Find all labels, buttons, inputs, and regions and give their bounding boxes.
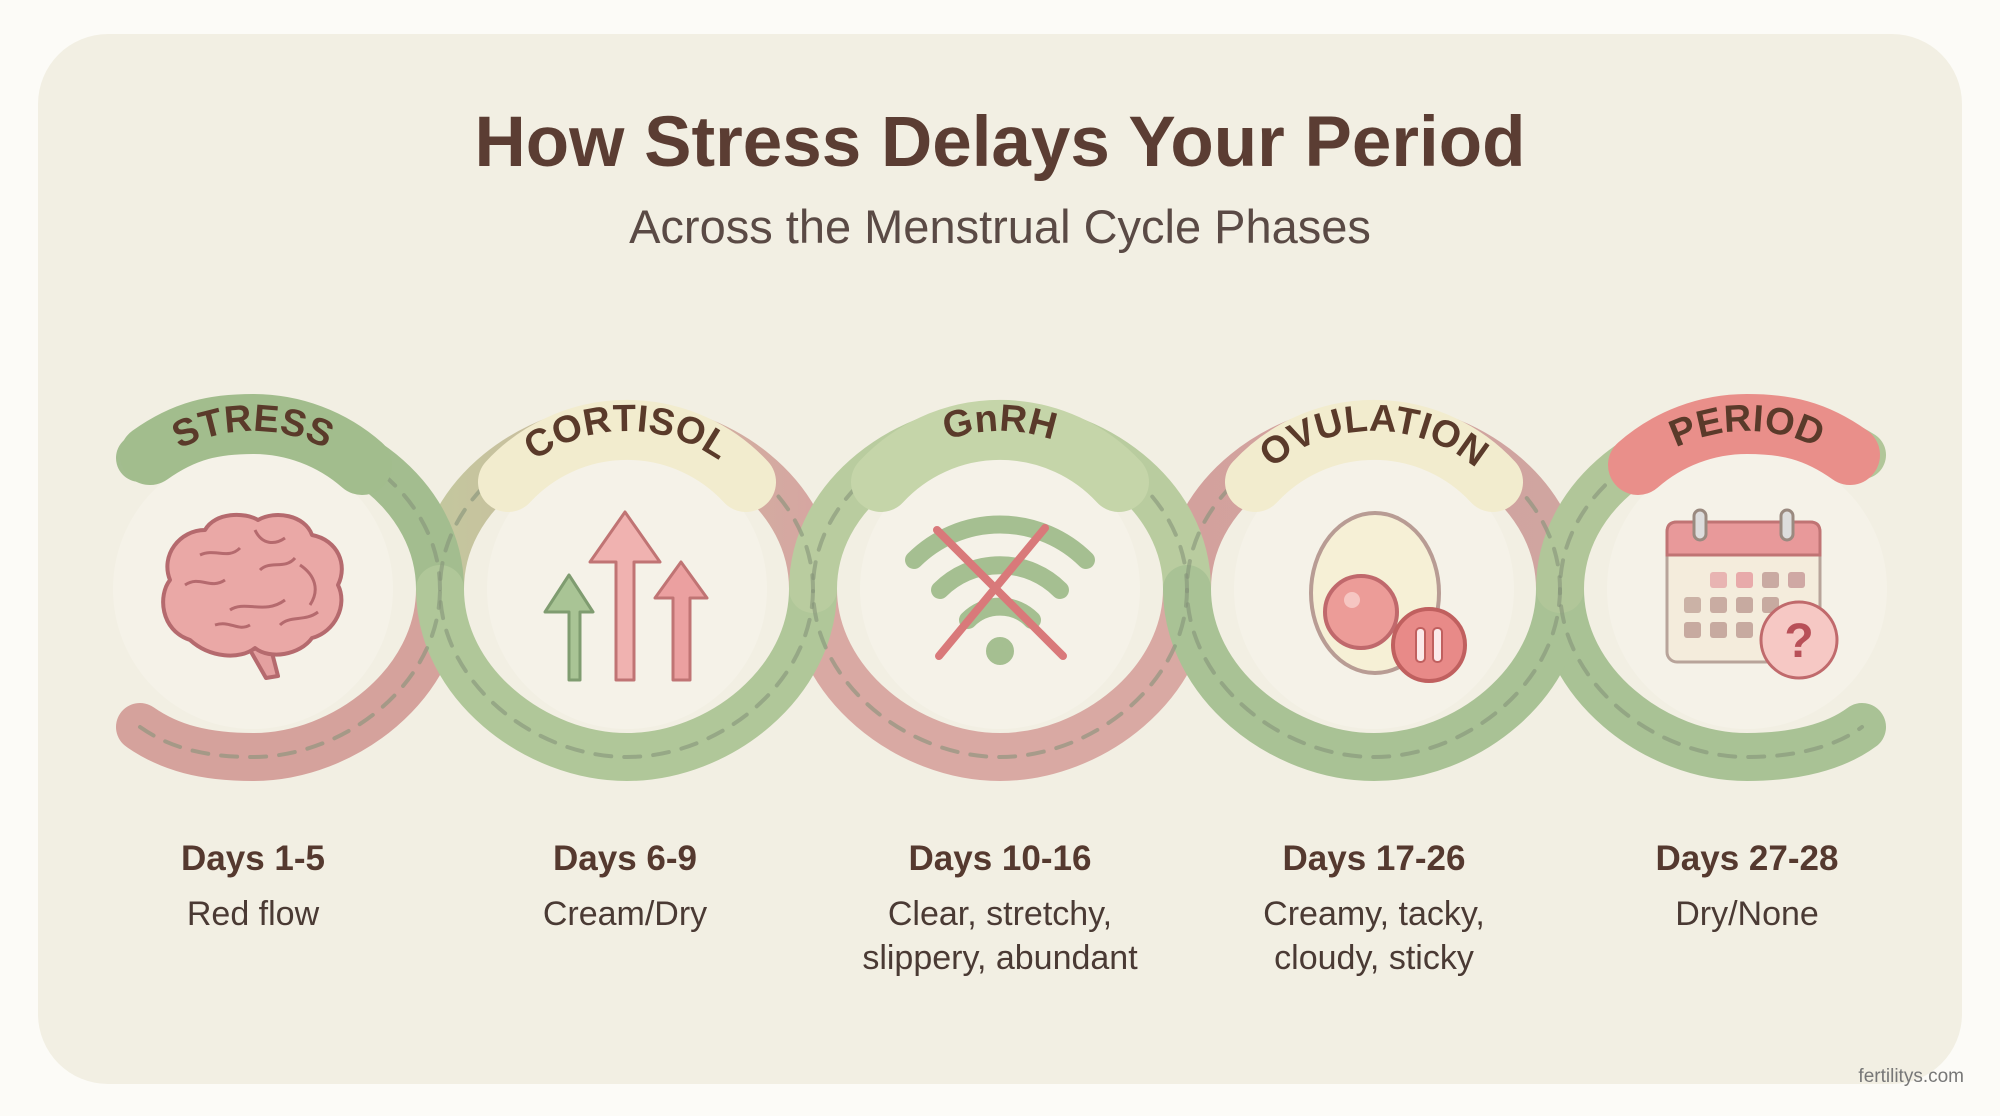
icon: calendar with question	[1667, 510, 1837, 678]
phase text: days 1-5: Days 1-5	[181, 839, 325, 878]
icon: calendar with question: ?	[1784, 615, 1814, 668]
phase text: days 17-26: Creamy, tacky,	[1263, 895, 1485, 933]
cap labels: STRESS	[173, 404, 333, 446]
phase text: days 27-28	[1656, 839, 1838, 933]
phase text: days 10-16: slippery, abundant	[862, 939, 1138, 977]
strand A (green start)	[140, 427, 1862, 757]
phase text: days 17-26: cloudy, sticky	[1274, 939, 1474, 977]
cap labels	[173, 404, 1822, 466]
cap labels: OVULATION	[1262, 405, 1490, 466]
phase text: days 1-5	[181, 839, 325, 933]
phase text: days 27-28: Days 27-28	[1656, 839, 1838, 878]
icon: arrows	[545, 512, 707, 680]
icon: blocked wifi	[914, 525, 1086, 661]
phase text: days 6-9	[543, 839, 707, 933]
watermark: fertilitys.com	[1858, 1066, 1964, 1087]
circle interiors	[113, 449, 1887, 729]
phase text: days 6-9: Cream/Dry	[543, 895, 707, 933]
cap labels: CORTISOL	[526, 404, 721, 460]
phase text: days 10-16: Clear, stretchy,	[888, 895, 1112, 933]
cap labels: PERIOD	[1668, 405, 1822, 446]
dashed centerlines	[140, 427, 1862, 757]
icon: paused egg	[1311, 513, 1465, 681]
label caps	[150, 424, 1850, 482]
icon: brain	[163, 515, 342, 678]
phase text: days 10-16	[862, 839, 1138, 977]
cap labels: GnRH	[944, 404, 1057, 439]
phase text: days 27-28: Dry/None	[1675, 895, 1819, 933]
phase text: days 6-9: Days 6-9	[553, 839, 697, 878]
subtitle: Across the Menstrual Cycle Phases	[629, 200, 1371, 253]
phase text: days 1-5: Red flow	[187, 895, 319, 933]
phase text: days 17-26: Days 17-26	[1283, 839, 1465, 878]
strand B (pink start)	[140, 427, 1862, 757]
phase text: days 10-16: Days 10-16	[909, 839, 1091, 878]
title: How Stress Delays Your Period	[475, 103, 1525, 182]
phase text: days 17-26	[1263, 839, 1485, 977]
